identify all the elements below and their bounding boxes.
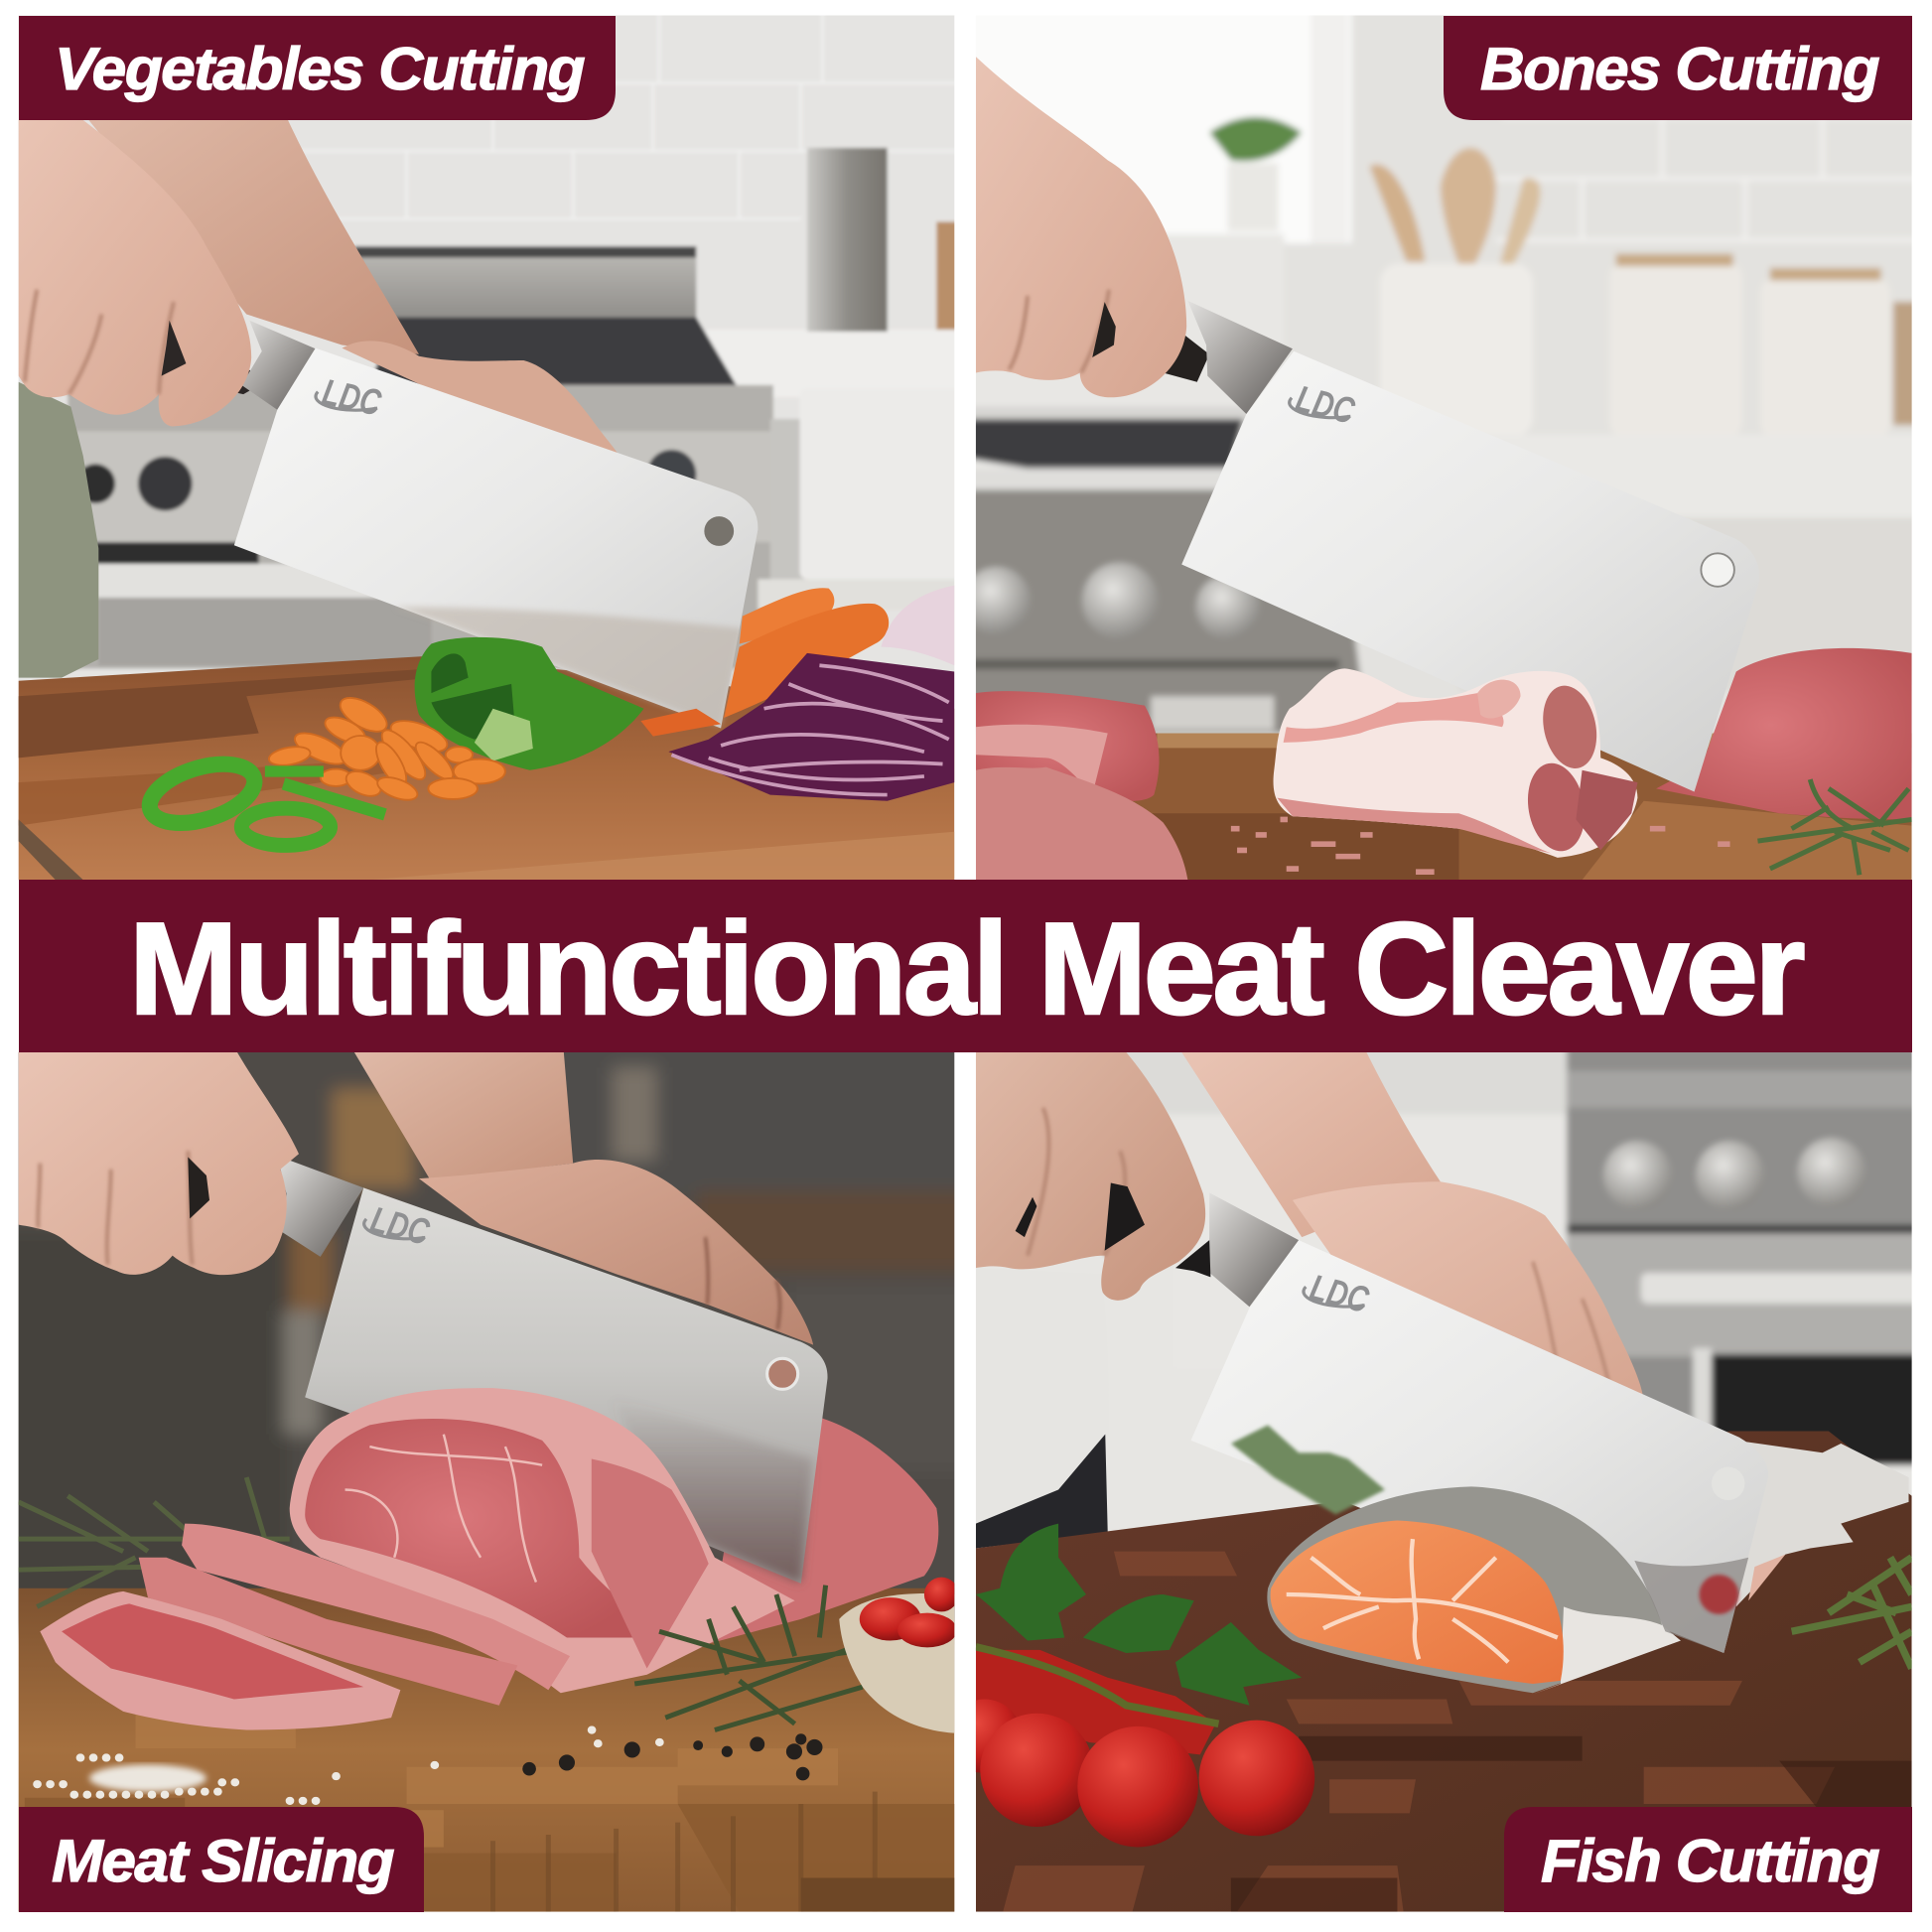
salmon steak [1267, 1486, 1681, 1695]
dill [1792, 1558, 1912, 1668]
label: meat slicing [19, 1807, 424, 1912]
gripping hand [976, 57, 1186, 397]
back hand [342, 342, 618, 453]
gripping hand [19, 120, 251, 426]
kitchen background [954, 0, 1932, 764]
gripping hand [976, 1052, 1205, 1301]
logo: LDC [1292, 377, 1359, 432]
tomatoes [947, 1647, 1314, 1847]
cleaver bolster [241, 321, 316, 410]
onion [881, 586, 954, 665]
background rosemary [19, 1477, 290, 1606]
cleaver bolster [277, 1156, 363, 1257]
cleaver handle between fingers [188, 1157, 209, 1218]
cutting board [19, 656, 954, 880]
cleaver handle between fingers [1016, 1182, 1210, 1277]
cleaver handle [1166, 336, 1207, 382]
cleaver bolster [1207, 1192, 1299, 1307]
panel: bones cutting [954, 0, 1932, 881]
sliced carrots [267, 691, 505, 804]
fish tail [1736, 1441, 1909, 1606]
cleaver blade [234, 348, 758, 729]
raw meat left [976, 691, 1187, 880]
salt [37, 1730, 663, 1801]
meat slice 2 [139, 1558, 517, 1706]
rosemary [1757, 779, 1912, 875]
logo [360, 1196, 434, 1253]
cleaver bolster [1187, 301, 1293, 414]
carrots [640, 588, 889, 737]
logo: LDC [366, 1198, 434, 1253]
cleaver handle [238, 369, 250, 395]
cleaver handle between fingers [1092, 302, 1116, 357]
forearm [354, 1052, 573, 1181]
title text: Multifunctional Meat Cleaver [129, 896, 1804, 1041]
bell pepper [415, 637, 644, 770]
red cabbage [668, 653, 954, 801]
peppercorns [522, 1733, 823, 1780]
blade tip reflection [1634, 1558, 1748, 1653]
shirt [976, 1268, 1109, 1521]
blade reflection: herb [1231, 1425, 1385, 1514]
back hand [419, 1160, 813, 1345]
bone [1274, 668, 1637, 858]
logo [1300, 1265, 1374, 1320]
sliced pepper rings [143, 753, 385, 845]
label: bones cutting: Bones Cutting [1480, 36, 1879, 102]
label: meat slicing: Meat Slicing [52, 1828, 394, 1894]
cleaver blade [1191, 1240, 1768, 1653]
label: fish cutting [1504, 1807, 1912, 1912]
label: vegetables cutting [19, 16, 616, 120]
label: fish cutting: Fish Cutting [1541, 1828, 1879, 1894]
raw meat right [1656, 648, 1912, 819]
cutting board [976, 734, 1912, 881]
shirt [19, 382, 98, 678]
label: vegetables cutting: Vegetables Cutting [55, 36, 585, 102]
logo [314, 379, 382, 415]
logo: LDC [1306, 1266, 1374, 1320]
meat slice 3 [182, 1524, 570, 1690]
forearm [1181, 1052, 1441, 1237]
panel: vegetables cutting [0, 0, 989, 880]
kitchen background [954, 1028, 1932, 1558]
cleaver handle between fingers [162, 321, 186, 376]
butcher block board [976, 1432, 1912, 1912]
label: bones cutting [1444, 16, 1912, 120]
dark kitchen background [0, 1016, 1017, 1631]
forearm [86, 117, 419, 354]
panel: fish cutting [947, 1028, 1932, 1912]
panel: meat slicing [0, 1016, 1017, 1912]
main roast [290, 1388, 795, 1693]
meat crumbs [1231, 819, 1730, 872]
title banner [19, 880, 1912, 1052]
kitchen background [0, 0, 989, 709]
far end of roast [709, 1416, 938, 1644]
foreground rosemary [634, 1586, 863, 1730]
bowl of tomatoes [839, 1578, 959, 1733]
cleaver blade [305, 1187, 828, 1584]
gripping hand [19, 1052, 299, 1275]
logo: LDC [319, 370, 385, 424]
pants [976, 1435, 1108, 1548]
parsley [976, 1524, 1302, 1706]
butcher block board [19, 1588, 954, 1912]
logo [1286, 375, 1359, 432]
cleaver blade [1181, 351, 1759, 791]
meat slice 1 [40, 1591, 400, 1730]
back hand [1293, 1181, 1644, 1401]
